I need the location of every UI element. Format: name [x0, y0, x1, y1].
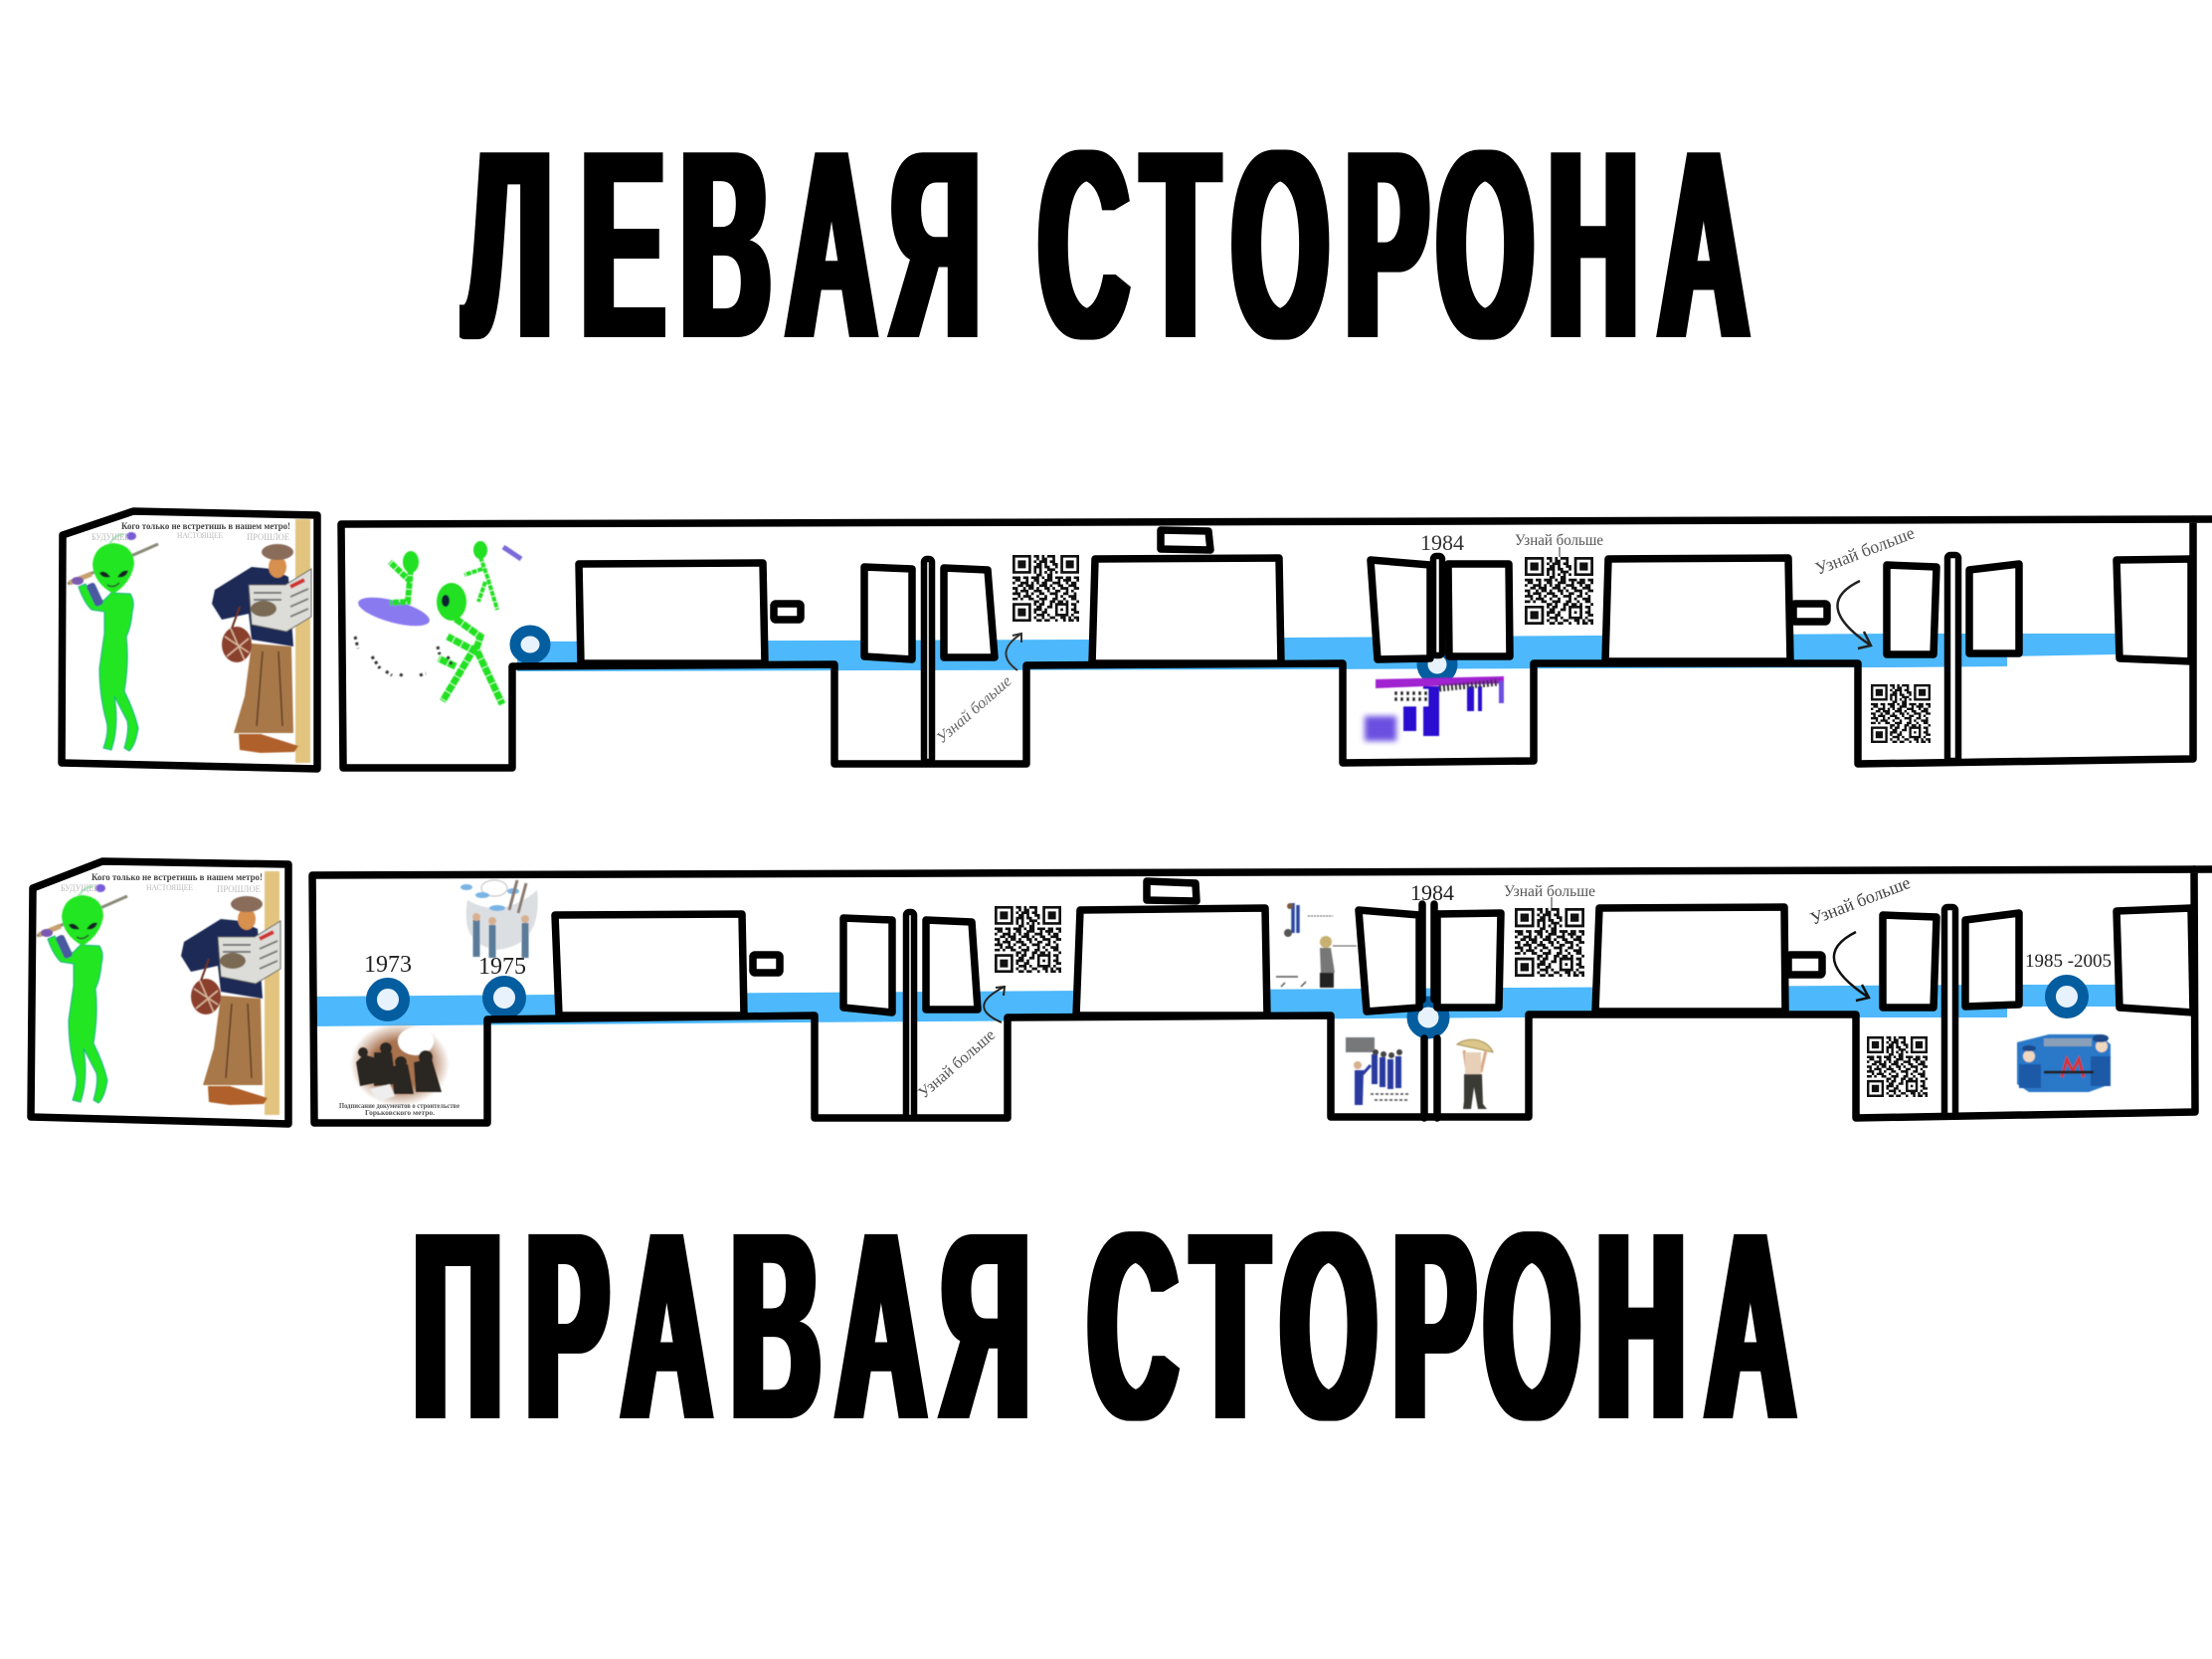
curved arrow 3 — [1834, 932, 1869, 1001]
doors 1 — [864, 559, 995, 762]
station marker 1984 — [1412, 1002, 1444, 1033]
document caption line 2: Горьковского метро. — [365, 1108, 435, 1117]
doors 3 — [1887, 555, 2019, 761]
station marker 1985-2005 — [2051, 981, 2083, 1013]
poster caption: Кого только не встретишь в нашем метро! — [121, 522, 290, 532]
panel: right side diagram — [31, 861, 2212, 1124]
metro staff illustration — [2017, 1034, 2111, 1092]
box 1 with connector — [579, 563, 801, 663]
curved arrow 1 — [1006, 634, 1021, 670]
station marker 1984 — [1422, 649, 1452, 679]
label: present: НАСТОЯЩЕЕ — [177, 530, 223, 540]
aliens and saucer illustration — [355, 541, 521, 704]
station marker 1973 — [372, 983, 404, 1016]
QR code with learn more — [1515, 532, 1603, 624]
doors 1984 — [1359, 904, 1501, 1118]
station marker, start — [515, 631, 545, 658]
rotated text: learn more 3: Узнай больше — [1807, 872, 1913, 929]
box 1 with connector — [555, 914, 780, 1015]
QR code with learn more — [1504, 883, 1595, 976]
label: past: ПРОШЛОЕ — [217, 884, 261, 894]
year 1984: 1984 — [1420, 530, 1464, 555]
alien figure — [37, 884, 127, 1103]
QR code 3 — [1871, 685, 1931, 742]
label: future: БУДУЩЕЕ — [61, 883, 98, 893]
box 2 with handle — [1092, 530, 1281, 663]
doors 3 — [1883, 907, 2019, 1116]
booth outline — [62, 511, 317, 769]
QR code 1 — [995, 907, 1061, 972]
police squad illustration — [1346, 1037, 1410, 1105]
workers with cloud illustration — [461, 880, 538, 958]
box 2 with handle — [1076, 881, 1267, 1015]
signing documents illustration — [339, 1022, 461, 1117]
panel: left side diagram — [62, 511, 2212, 769]
QR code 1 — [1013, 556, 1079, 621]
document caption line 1: Подписание документов о строительстве — [339, 1101, 461, 1110]
label: past: ПРОШЛОЕ — [247, 532, 289, 542]
rotated text: learn more 1: Узнай больше — [933, 673, 1015, 747]
doors 1984 — [1371, 556, 1510, 659]
car outline — [341, 519, 2212, 768]
poster caption: Кого только не встретишь в нашем метро! — [92, 873, 263, 883]
rotated text: learn more 3: Узнай больше — [1812, 522, 1917, 579]
box 3 with connector — [1605, 558, 1827, 661]
end window — [2117, 559, 2191, 661]
rotated text: learn more 1: Узнай больше — [914, 1025, 999, 1102]
man with protractor illustration — [1457, 1039, 1493, 1109]
title: left side: ЛЕВАЯ СТОРОНА — [464, 94, 1749, 395]
curved arrow 1 — [984, 987, 1005, 1022]
booth poster, right side — [31, 861, 288, 1124]
title: right side: ПРАВАЯ СТОРОНА — [414, 1177, 1795, 1476]
man with newspaper — [212, 519, 311, 763]
booth outline — [31, 861, 288, 1124]
station marker 1975 — [487, 981, 521, 1014]
booth poster, left side — [62, 511, 317, 769]
year 1984: 1984 — [1410, 880, 1454, 905]
man with newspaper — [181, 871, 280, 1115]
bridge illustration — [1365, 676, 1504, 741]
year 1975: 1975 — [478, 954, 526, 980]
end window — [2117, 908, 2193, 1013]
label: future: БУДУЩЕЕ — [92, 532, 129, 542]
blue metro line, left side — [517, 634, 2117, 671]
curved arrow 3 — [1837, 581, 1871, 648]
year range 1985-2005: 1985 -2005 — [2025, 952, 2112, 972]
doors 1 — [843, 912, 978, 1118]
learn more label 2: Узнай больше — [1504, 883, 1595, 900]
blue metro line, right side — [310, 985, 2117, 1026]
tunnel builders illustration — [1276, 903, 1357, 988]
learn more label 2: Узнай больше — [1515, 532, 1603, 549]
label: present: НАСТОЯЩЕЕ — [146, 882, 193, 892]
box 3 with connector — [1595, 907, 1822, 1012]
car outline — [312, 869, 2212, 1123]
alien figure — [68, 532, 158, 751]
QR code 3 — [1867, 1037, 1928, 1096]
year 1973: 1973 — [364, 952, 412, 978]
